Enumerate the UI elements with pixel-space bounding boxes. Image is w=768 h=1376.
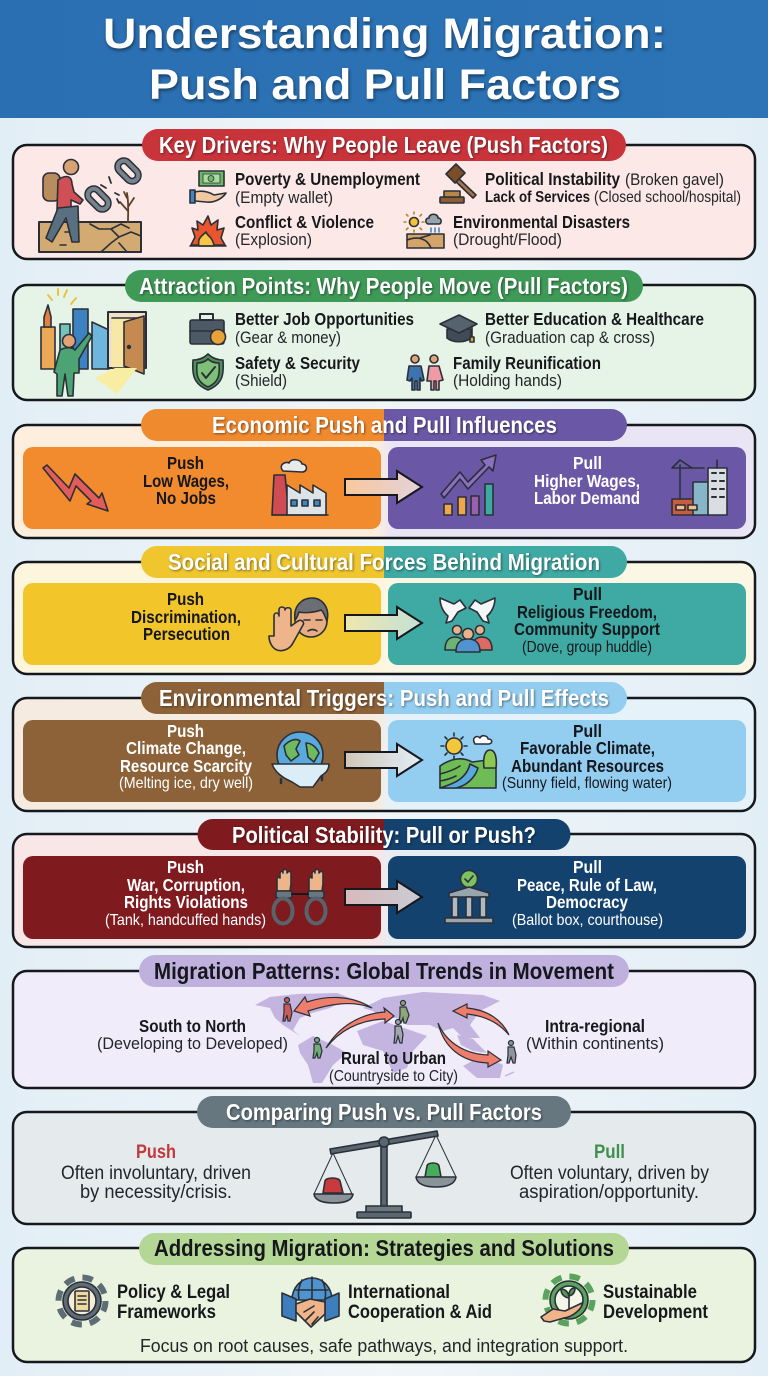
- text: poverty and unemployment: Poverty & Unemployment: [235, 169, 420, 189]
- text: education and healthcare: [485, 309, 704, 347]
- icon: broken gavel: [440, 164, 476, 203]
- text: religious freedom: Community Support: [514, 619, 660, 639]
- text: international cooperation: [348, 1282, 492, 1323]
- text: family reunification: (Holding hands): [453, 371, 562, 390]
- text: peace and rule of law: [512, 857, 663, 929]
- text: discrimination: Push: [167, 589, 204, 609]
- text: war and corruption: [105, 857, 266, 929]
- arrow: environmental push to pull: [345, 744, 422, 776]
- text: policy frameworks: Frameworks: [117, 1302, 216, 1323]
- arrow: asia to australia: [438, 1023, 501, 1067]
- text: poverty and unemployment: [235, 169, 420, 207]
- panel: comparing factors: [13, 1096, 755, 1224]
- text: political instability and lack of services: [485, 169, 741, 206]
- text: safety and security: (Shield): [235, 371, 287, 390]
- panel: economic influences: [13, 409, 755, 538]
- text: peace and rule of law: (Ballot box, courthouse): [512, 912, 663, 929]
- text: family reunification: [453, 353, 601, 390]
- text: low wages: [143, 453, 229, 508]
- icon: falling arrow: [43, 465, 108, 511]
- icon: sunny field: [440, 733, 496, 788]
- icon: hand stop and face: [269, 598, 328, 651]
- icon: shield: [193, 354, 223, 390]
- text: conflict and violence: [235, 212, 374, 249]
- text: low wages: Push: [167, 453, 204, 473]
- header banner: [0, 0, 768, 118]
- text: poverty and unemployment: (Empty wallet): [235, 188, 333, 207]
- panel: migration patterns: [13, 955, 755, 1088]
- icon: gear with scroll: [58, 1278, 106, 1324]
- icon: briefcase and coin: [190, 314, 226, 344]
- card: economic pull: [388, 447, 746, 529]
- text: favorable climate: [502, 721, 672, 792]
- text: low wages: Low Wages,: [143, 471, 229, 491]
- icon: gear with seedling: [541, 1276, 592, 1324]
- text: pull comparison: aspiration/opportunity.: [519, 1182, 699, 1203]
- heading: key drivers: Key Drivers: Why People Leave (Push Factors): [159, 132, 608, 158]
- icon: explosion: [190, 216, 226, 246]
- text: better job opportunities: (Gear & money): [235, 328, 341, 347]
- panel: environmental triggers: [13, 682, 755, 811]
- heading: social: Social and Cultural Forces Behind Migration: [168, 549, 600, 575]
- text: higher wages: Labor Demand: [534, 488, 640, 508]
- text: policy frameworks: Policy & Legal: [117, 1282, 230, 1303]
- icon: doves and group: [440, 598, 495, 652]
- icon: graduation cap: [440, 315, 477, 342]
- text: education and healthcare: (Graduation cap & cross): [485, 328, 655, 347]
- arrow: to north america: [294, 997, 372, 1016]
- icon: traveller leaving cracked land: [39, 158, 141, 252]
- heading: economic: Economic Push and Pull Influences: [212, 412, 557, 438]
- text: discrimination: [131, 589, 241, 644]
- text: sustainable development: [603, 1282, 709, 1323]
- text: push comparison: Push: [136, 1142, 176, 1163]
- card: environmental push: [23, 720, 381, 802]
- icon: rising chart: [441, 455, 496, 515]
- text: religious freedom: [514, 584, 660, 656]
- text: south to north: South to North: [139, 1016, 246, 1036]
- text: rural to urban: [329, 1048, 458, 1085]
- text: push comparison: by necessity/crisis.: [80, 1182, 232, 1203]
- text: intra-regional: [526, 1016, 664, 1053]
- text: religious freedom: Pull: [573, 584, 602, 604]
- icon: construction and buildings: [672, 460, 727, 515]
- text: climate change: (Melting ice, dry well): [119, 775, 253, 792]
- text: discrimination: Persecution: [143, 624, 230, 644]
- text: environmental disasters: Environmental Disasters: [453, 212, 630, 232]
- icon: city and open door: [41, 289, 146, 396]
- text: pull comparison: Pull: [594, 1142, 625, 1163]
- text: peace and rule of law: Democracy: [546, 892, 628, 912]
- text: political instability and lack of services: (Broken gavel): [625, 170, 724, 189]
- text: family reunification: Family Reunification: [453, 353, 601, 373]
- heading: patterns: Migration Patterns: Global Trends in Movement: [154, 958, 614, 984]
- text: environmental disasters: (Drought/Flood): [453, 230, 562, 249]
- icon: money and hand: [190, 171, 226, 203]
- text: conflict and violence: Conflict & Violence: [235, 212, 374, 232]
- text: environmental disasters: [453, 212, 630, 249]
- title: Understanding Migration:: [103, 10, 666, 58]
- card: social push: [23, 583, 381, 665]
- arrow: economic push to pull: [345, 471, 422, 503]
- text: education and healthcare: Better Education & Healthcare: [485, 309, 704, 329]
- text: peace and rule of law: Pull: [573, 857, 602, 877]
- text: sustainable development: Development: [603, 1302, 709, 1323]
- panel: push factors: [13, 129, 755, 259]
- text: south to north: (Developing to Developed): [97, 1034, 288, 1053]
- text: political instability and lack of services: (Closed school/hospital): [594, 189, 741, 206]
- icon: handcuffed hands: [274, 870, 326, 924]
- text: sustainable development: Sustainable: [603, 1282, 697, 1303]
- text: higher wages: [534, 453, 640, 508]
- text: low wages: No Jobs: [156, 488, 216, 508]
- text: international cooperation: International: [348, 1282, 450, 1303]
- text: better job opportunities: [235, 309, 414, 347]
- text: climate change: [119, 721, 253, 792]
- text: push comparison: Often involuntary, driven: [61, 1163, 251, 1184]
- text: war and corruption: Rights Violations: [124, 892, 248, 912]
- text: conflict and violence: (Explosion): [235, 230, 312, 249]
- arrow: political push to pull: [345, 881, 422, 913]
- text: climate change: Push: [167, 721, 204, 741]
- text: pull comparison: Often voluntary, driven by: [510, 1163, 709, 1184]
- figures: migrants: [283, 998, 516, 1063]
- heading: political: Political Stability: Pull or Push?: [232, 822, 536, 848]
- text: war and corruption: (Tank, handcuffed hands): [105, 912, 266, 929]
- text: safety and security: Safety & Security: [235, 353, 360, 373]
- icon: drought and flood: [404, 212, 444, 248]
- text: favorable climate: Pull: [573, 721, 602, 741]
- text: favorable climate: (Sunny field, flowing water): [502, 775, 672, 792]
- text: push comparison: [61, 1142, 251, 1203]
- text: favorable climate: Favorable Climate,: [520, 738, 655, 758]
- text: political instability and lack of services: Lack of Services: [485, 189, 590, 206]
- heading: environmental: Environmental Triggers: Push and Pull Effects: [159, 685, 609, 711]
- text: safety and security: [235, 353, 360, 390]
- icon: family holding hands: [407, 355, 443, 390]
- world map with arrows: [255, 992, 516, 1083]
- card: political push: [23, 856, 381, 939]
- text: rural to urban: (Countryside to City): [329, 1068, 458, 1085]
- text: intra-regional: Intra-regional: [545, 1016, 645, 1036]
- text: pull comparison: [510, 1142, 709, 1203]
- panel: political stability: [13, 819, 755, 947]
- heading: comparing: Comparing Push vs. Pull Factors: [226, 1099, 542, 1125]
- panel: strategies and solutions: [13, 1233, 755, 1362]
- text: religious freedom: Religious Freedom,: [517, 602, 657, 622]
- text: rural to urban: Rural to Urban: [341, 1048, 446, 1068]
- heading: addressing migration: Addressing Migration: Strategies and Solutions: [154, 1235, 614, 1261]
- card: environmental pull: [388, 720, 746, 802]
- card: economic push: [23, 447, 381, 529]
- icon: factory: [272, 460, 328, 515]
- title: [103, 10, 666, 109]
- text: climate change: Climate Change,: [126, 738, 246, 758]
- icon: melting globe: [272, 732, 329, 787]
- heading: economic: [141, 409, 627, 441]
- panel: social forces: [13, 546, 755, 674]
- icon: globe and handshake: [282, 1277, 339, 1327]
- text: political instability and lack of services: Political Instability: [485, 169, 620, 189]
- text: favorable climate: Abundant Resources: [511, 756, 664, 776]
- text: discrimination: Discrimination,: [131, 607, 241, 627]
- arrow: south america to europe: [326, 1008, 394, 1048]
- heading: attraction points: Attraction Points: Why People Move (Pull Factors): [139, 273, 628, 299]
- text: higher wages: Pull: [573, 453, 602, 473]
- text: peace and rule of law: Peace, Rule of Law,: [517, 875, 657, 895]
- text: better job opportunities: Better Job Opportunities: [235, 309, 414, 329]
- text: climate change: Resource Scarcity: [120, 756, 252, 776]
- text: intra-regional: (Within continents): [526, 1034, 664, 1053]
- text: focus statement: Focus on root causes, safe pathways, and integration support.: [140, 1335, 628, 1356]
- arrow: social push to pull: [345, 607, 422, 639]
- text: international cooperation: Cooperation & Aid: [348, 1302, 492, 1323]
- text: war and corruption: Push: [167, 857, 204, 877]
- icon: balance scale: [314, 1131, 456, 1218]
- icon: ballot box and courthouse: [445, 870, 493, 923]
- card: social pull: [388, 583, 746, 665]
- text: religious freedom: (Dove, group huddle): [522, 639, 652, 656]
- arrow: australia to asia: [453, 1004, 509, 1035]
- panel: pull factors: [13, 270, 755, 400]
- card: political pull: [388, 856, 746, 939]
- text: south to north: [97, 1016, 288, 1053]
- text: higher wages: Higher Wages,: [534, 471, 640, 491]
- title: Push and Pull Factors: [149, 61, 621, 109]
- text: war and corruption: War, Corruption,: [127, 875, 245, 895]
- text: policy frameworks: [117, 1282, 230, 1323]
